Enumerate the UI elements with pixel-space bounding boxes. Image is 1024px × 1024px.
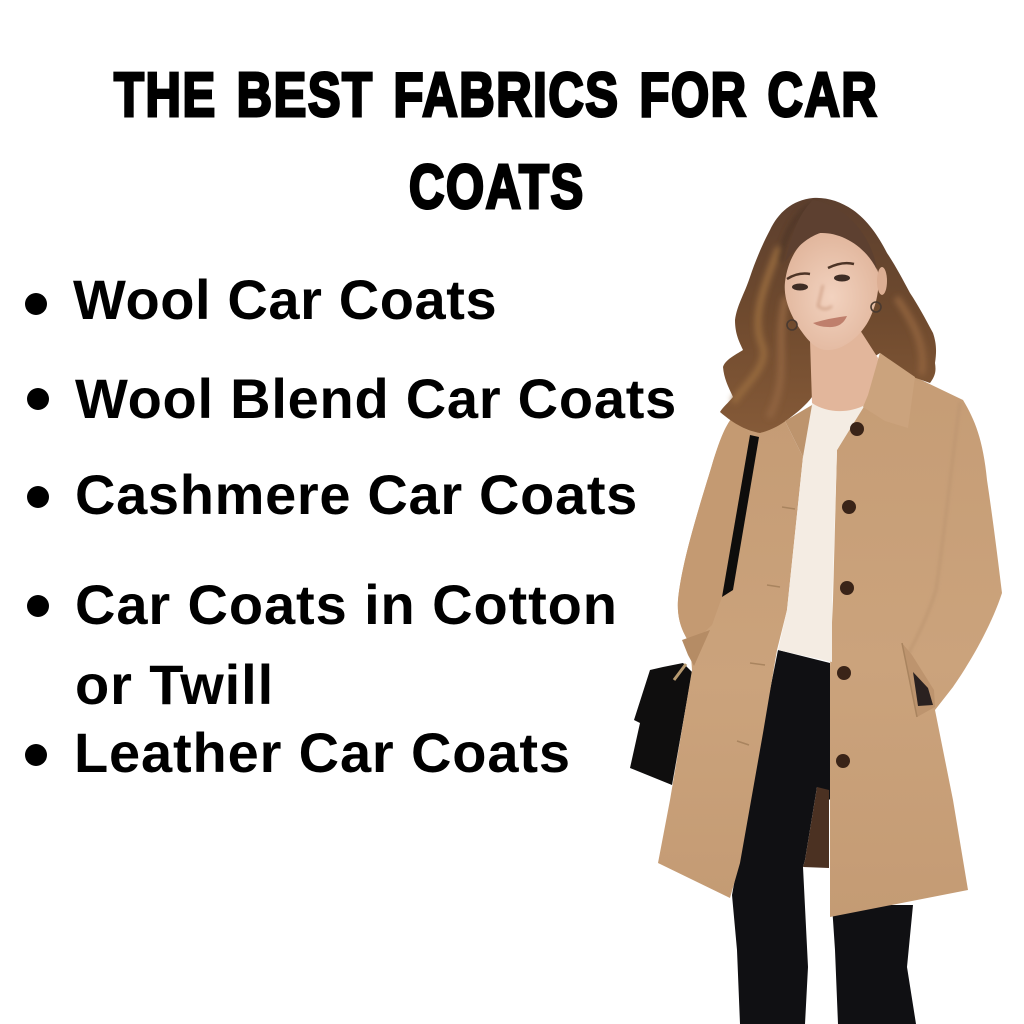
left trouser leg <box>732 650 830 1024</box>
bag clasp <box>674 664 686 680</box>
ear <box>877 267 887 295</box>
list item: cotton or twill: Car Coats in Cotton <box>75 573 618 636</box>
list item: wool blend: Wool Blend Car Coats <box>75 367 677 430</box>
earrings <box>787 302 881 330</box>
coat right panel <box>830 353 1002 917</box>
right trouser leg <box>832 905 916 1024</box>
list item: wool: Wool Car Coats <box>73 268 497 331</box>
bag strap <box>722 435 759 597</box>
list item: cotton or twill: or Twill <box>75 653 274 716</box>
bullet list <box>25 268 677 784</box>
coat lining <box>803 787 829 868</box>
nose shadow <box>818 285 832 309</box>
hair highlights <box>735 205 923 415</box>
left cuff <box>682 630 710 666</box>
list item: leather: Leather Car Coats <box>74 721 571 784</box>
list item: cotton or twill <box>27 573 618 716</box>
face <box>785 232 879 350</box>
coat buttons <box>836 422 864 768</box>
left lapel <box>785 405 812 457</box>
right pocket and hand <box>902 643 935 717</box>
right sleeve seam <box>908 402 960 655</box>
neck <box>810 330 878 413</box>
eyebrows <box>787 263 854 279</box>
coat stitching <box>737 507 917 745</box>
title: THE BEST FABRICS FOR CAR <box>114 61 878 130</box>
handbag <box>630 663 692 785</box>
title: COATS <box>409 153 585 222</box>
left sleeve shading <box>678 417 752 645</box>
eyes <box>792 284 808 290</box>
list item: cashmere: Cashmere Car Coats <box>75 463 638 526</box>
coat left panel <box>658 417 803 898</box>
hair <box>720 198 936 433</box>
title <box>113 61 878 222</box>
sweater <box>778 403 865 662</box>
collar right <box>863 353 915 428</box>
mouth <box>813 316 847 327</box>
face parting hair <box>785 200 877 270</box>
